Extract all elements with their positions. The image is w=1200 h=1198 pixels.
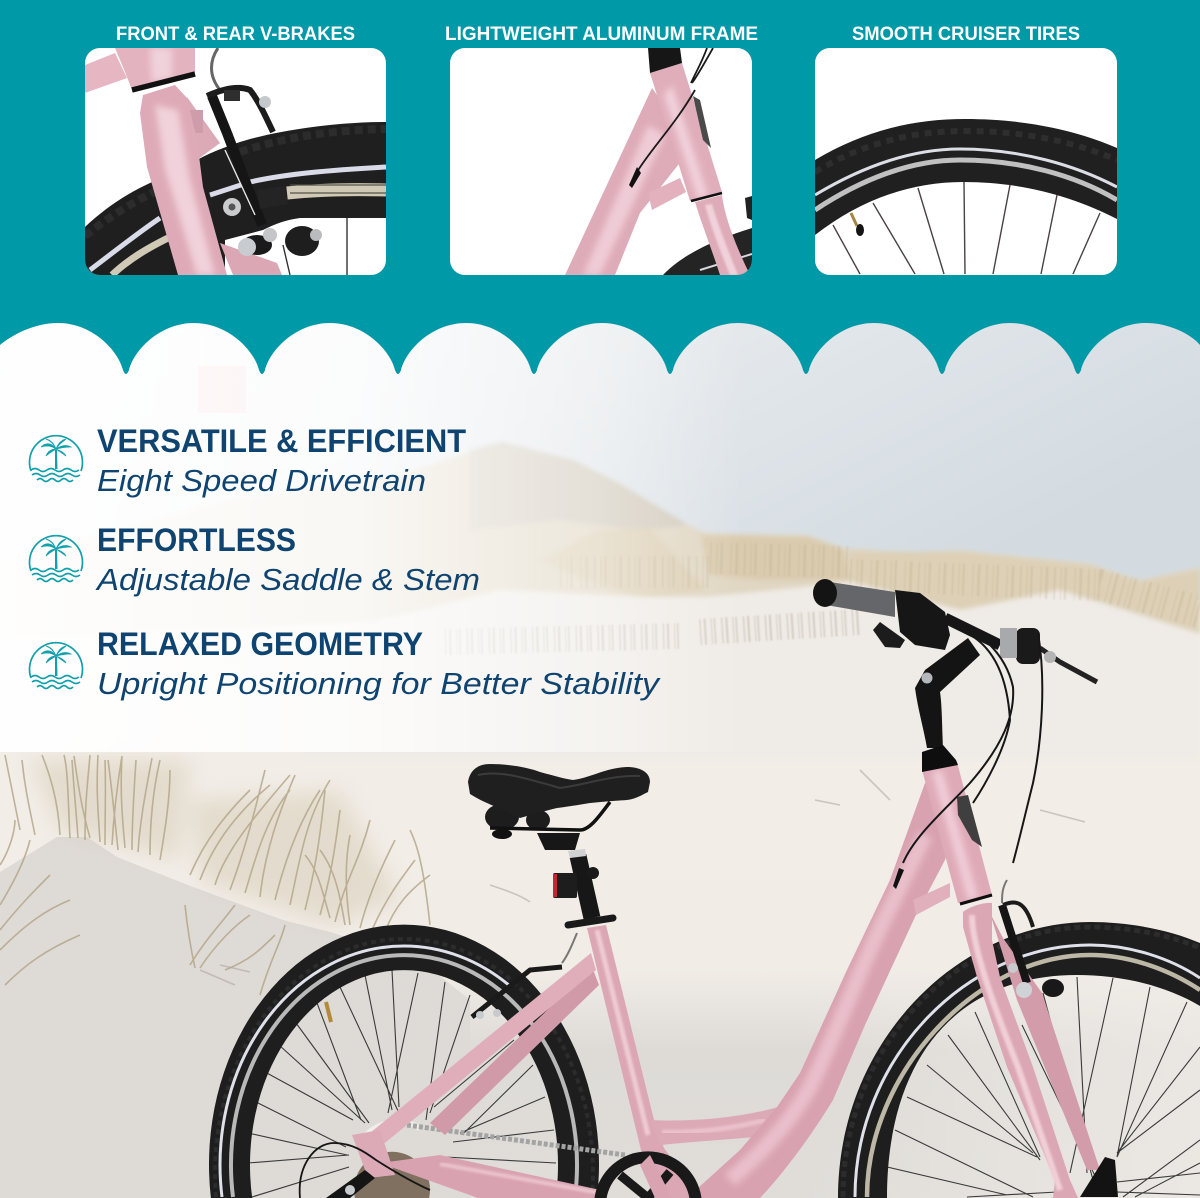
brake cable xyxy=(212,48,220,90)
heading: versatile and efficient: VERSATILE & EFFICIENT xyxy=(97,423,466,459)
cables xyxy=(637,48,713,172)
rim stripes xyxy=(815,149,1117,195)
heading: relaxed geometry: RELAXED GEOMETRY xyxy=(97,626,423,662)
rear brake xyxy=(472,933,577,1019)
grass haze xyxy=(30,760,400,925)
head badge xyxy=(957,795,982,847)
handlebar xyxy=(813,579,1097,682)
sky xyxy=(0,300,1200,600)
front hub xyxy=(1080,1157,1118,1197)
subheading: stability: Upright Positioning for Better Stability xyxy=(97,666,662,701)
beach photo background xyxy=(0,300,1200,1198)
panel: cruiser tire photo xyxy=(815,48,1117,275)
seat stays xyxy=(352,953,600,1198)
seat tube xyxy=(587,925,700,1198)
white stripe xyxy=(90,167,386,270)
tyre tread xyxy=(85,129,386,236)
gusset xyxy=(913,883,950,915)
spokes xyxy=(833,182,1100,274)
lighthouse xyxy=(198,335,246,413)
distant dunes xyxy=(0,442,1200,760)
head tube xyxy=(922,762,992,904)
saddle xyxy=(468,764,650,850)
head cap xyxy=(648,48,682,73)
tyre behind frame xyxy=(663,228,752,275)
label: smooth cruiser tires: SMOOTH CRUISER TIRES xyxy=(852,24,1080,45)
rear derailleur xyxy=(300,1143,430,1198)
tread xyxy=(815,131,1117,172)
icon: palm island 1 xyxy=(29,436,82,482)
foreground dune xyxy=(0,837,470,1198)
icon: palm island 2 xyxy=(29,536,82,582)
fork xyxy=(695,195,750,275)
seat post xyxy=(568,849,613,925)
rear light xyxy=(553,873,577,898)
head tube xyxy=(650,63,722,201)
fork blade xyxy=(140,85,227,275)
front wheel xyxy=(838,922,1200,1198)
fork lower brace xyxy=(220,243,282,275)
subheading: drivetrain: Eight Speed Drivetrain xyxy=(97,463,426,498)
brake pad xyxy=(260,204,261,209)
down tube xyxy=(685,783,960,1198)
silver rim xyxy=(287,190,386,193)
panel: v-brakes photo xyxy=(85,48,386,275)
head tube xyxy=(115,48,195,90)
tyre xyxy=(815,119,1117,235)
lower connecting tube xyxy=(650,1107,778,1145)
rear fork blade xyxy=(990,913,1100,1170)
gusset xyxy=(648,178,686,210)
cables xyxy=(903,622,1042,863)
cable end xyxy=(893,868,904,889)
beach grass xyxy=(0,755,430,995)
stem xyxy=(915,638,980,772)
brake arm xyxy=(207,88,322,256)
heading: effortless: EFFORTLESS xyxy=(97,522,296,558)
label: front and rear v-brakes: FRONT & REAR V-BRAKES xyxy=(116,24,355,45)
panel: aluminum frame photo xyxy=(450,48,752,275)
down tube xyxy=(565,88,690,275)
front fork blade xyxy=(963,903,1078,1198)
icon: palm island 3 xyxy=(29,643,82,688)
teal header with scalloped edge xyxy=(0,0,1200,374)
tyre xyxy=(85,122,386,275)
brake mounts xyxy=(246,235,272,255)
lower sand shading xyxy=(0,970,1200,1198)
feature list xyxy=(29,423,662,701)
pink bicycle xyxy=(209,579,1200,1198)
front brake xyxy=(1002,880,1064,998)
beach fence grass xyxy=(445,622,860,642)
spokes xyxy=(283,218,347,275)
dune grass texture xyxy=(560,558,1200,612)
head badge xyxy=(693,96,711,148)
rear blade xyxy=(187,97,220,160)
label: lightweight aluminum frame: LIGHTWEIGHT ALUMINUM FRAME xyxy=(445,24,758,45)
rear wheel xyxy=(209,925,599,1198)
chainring xyxy=(594,1151,702,1198)
valve xyxy=(326,1002,331,1022)
white fade overlay xyxy=(0,300,1200,752)
sand texture xyxy=(200,770,1085,985)
top tube xyxy=(85,53,127,93)
cassette and chain xyxy=(354,1122,625,1198)
subheading: saddle and stem: Adjustable Saddle & Stem xyxy=(95,562,480,597)
valve xyxy=(851,213,857,226)
